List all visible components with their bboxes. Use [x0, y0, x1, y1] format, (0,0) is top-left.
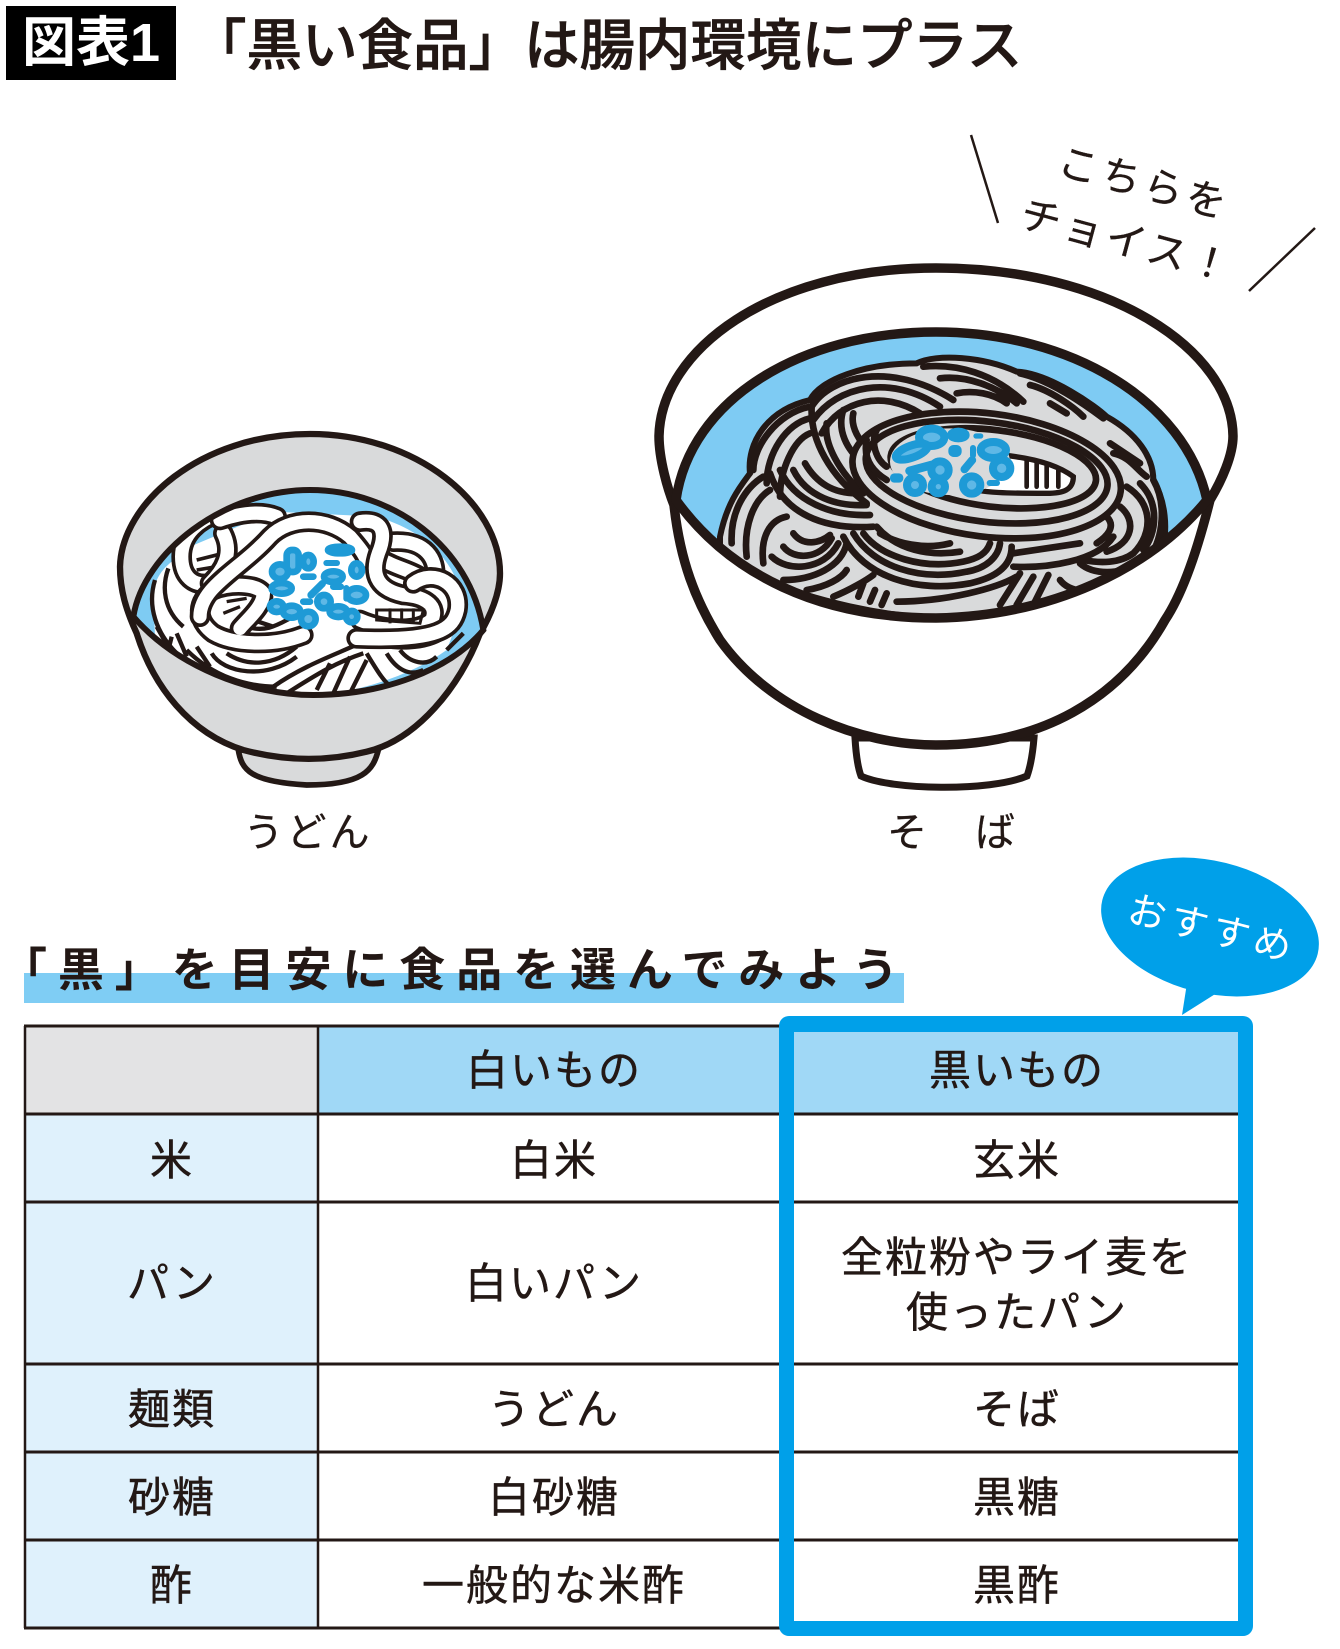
row: sugar: 黒糖 [973, 1474, 1061, 1521]
row: vinegar: 一般的な米酢 [422, 1562, 686, 1609]
row: noodles [128, 1386, 1061, 1433]
table header: white foods: 白いもの [466, 1047, 642, 1094]
row: bread [127, 1234, 1193, 1336]
title: 「黒い食品」は腸内環境にプラス [191, 15, 1022, 77]
table header: black foods background [794, 1032, 1238, 1114]
row: rice: 白米 [510, 1137, 598, 1184]
icon: udon bowl [120, 434, 500, 785]
row: noodles: うどん [488, 1386, 620, 1433]
row: noodles: そば [973, 1386, 1061, 1433]
row: rice [150, 1137, 1061, 1184]
soba bowl foot [855, 738, 1034, 787]
soba central loops [849, 408, 1124, 542]
soba soup [676, 332, 1207, 618]
row: rice: 米 [150, 1137, 194, 1184]
label: soba: そ ば [887, 811, 1019, 855]
udon bowl foot [238, 750, 378, 785]
callout text: recommended: おすすめ [1123, 889, 1301, 971]
row: sugar: 白砂糖 [488, 1474, 620, 1521]
udon scallions [270, 547, 366, 626]
row: bread: 全粒粉やライ麦を [841, 1234, 1193, 1281]
table header: white foods background [318, 1026, 794, 1114]
udon soup rim [133, 490, 483, 695]
table backgrounds [26, 1028, 779, 1626]
highlight frame: black foods column [779, 1016, 1253, 1636]
udon bowl body [120, 434, 500, 759]
accent line right [1249, 228, 1315, 291]
row: vinegar [150, 1562, 1061, 1609]
icon: soba bowl [659, 268, 1233, 787]
row: bread: 使ったパン [906, 1289, 1128, 1336]
title badge: 図表1 [22, 13, 160, 73]
table header corner [24, 1026, 318, 1114]
illustrations: bowls and accent lines [116, 134, 1316, 791]
title badge [6, 6, 176, 80]
udon noodles [152, 512, 463, 697]
subheading: 「黒」を目安に食品を選んでみよう [1, 944, 909, 996]
row: sugar: 砂糖 [128, 1474, 216, 1521]
label: udon: うどん [244, 811, 372, 855]
callout: choose this one, line 2: チョイス！ [1016, 192, 1238, 292]
soba bowl body [659, 268, 1233, 745]
row: noodles: 麺類 [128, 1386, 216, 1433]
row: bread: パン [127, 1260, 217, 1307]
callout: choose this one, line 1: こちらを [1053, 140, 1235, 228]
row: vinegar: 黒酢 [973, 1562, 1061, 1609]
callout bubble: recommended [1101, 858, 1319, 1015]
udon soup [133, 490, 483, 695]
soba inner hollow [963, 453, 1073, 493]
row: sugar [128, 1474, 1061, 1521]
row: vinegar: 酢 [150, 1562, 194, 1609]
table header: black foods: 黒いもの [929, 1047, 1105, 1094]
first column background [24, 1114, 318, 1627]
accent line left [971, 135, 998, 223]
row: bread: 白いパン [465, 1260, 643, 1307]
subheading highlight bar [24, 973, 904, 1003]
soba noodles [720, 358, 1165, 620]
row: rice: 玄米 [973, 1137, 1061, 1184]
soba scallions [890, 428, 1010, 495]
table grid lines [24, 1024, 1238, 1630]
soba soup rim [676, 332, 1207, 618]
